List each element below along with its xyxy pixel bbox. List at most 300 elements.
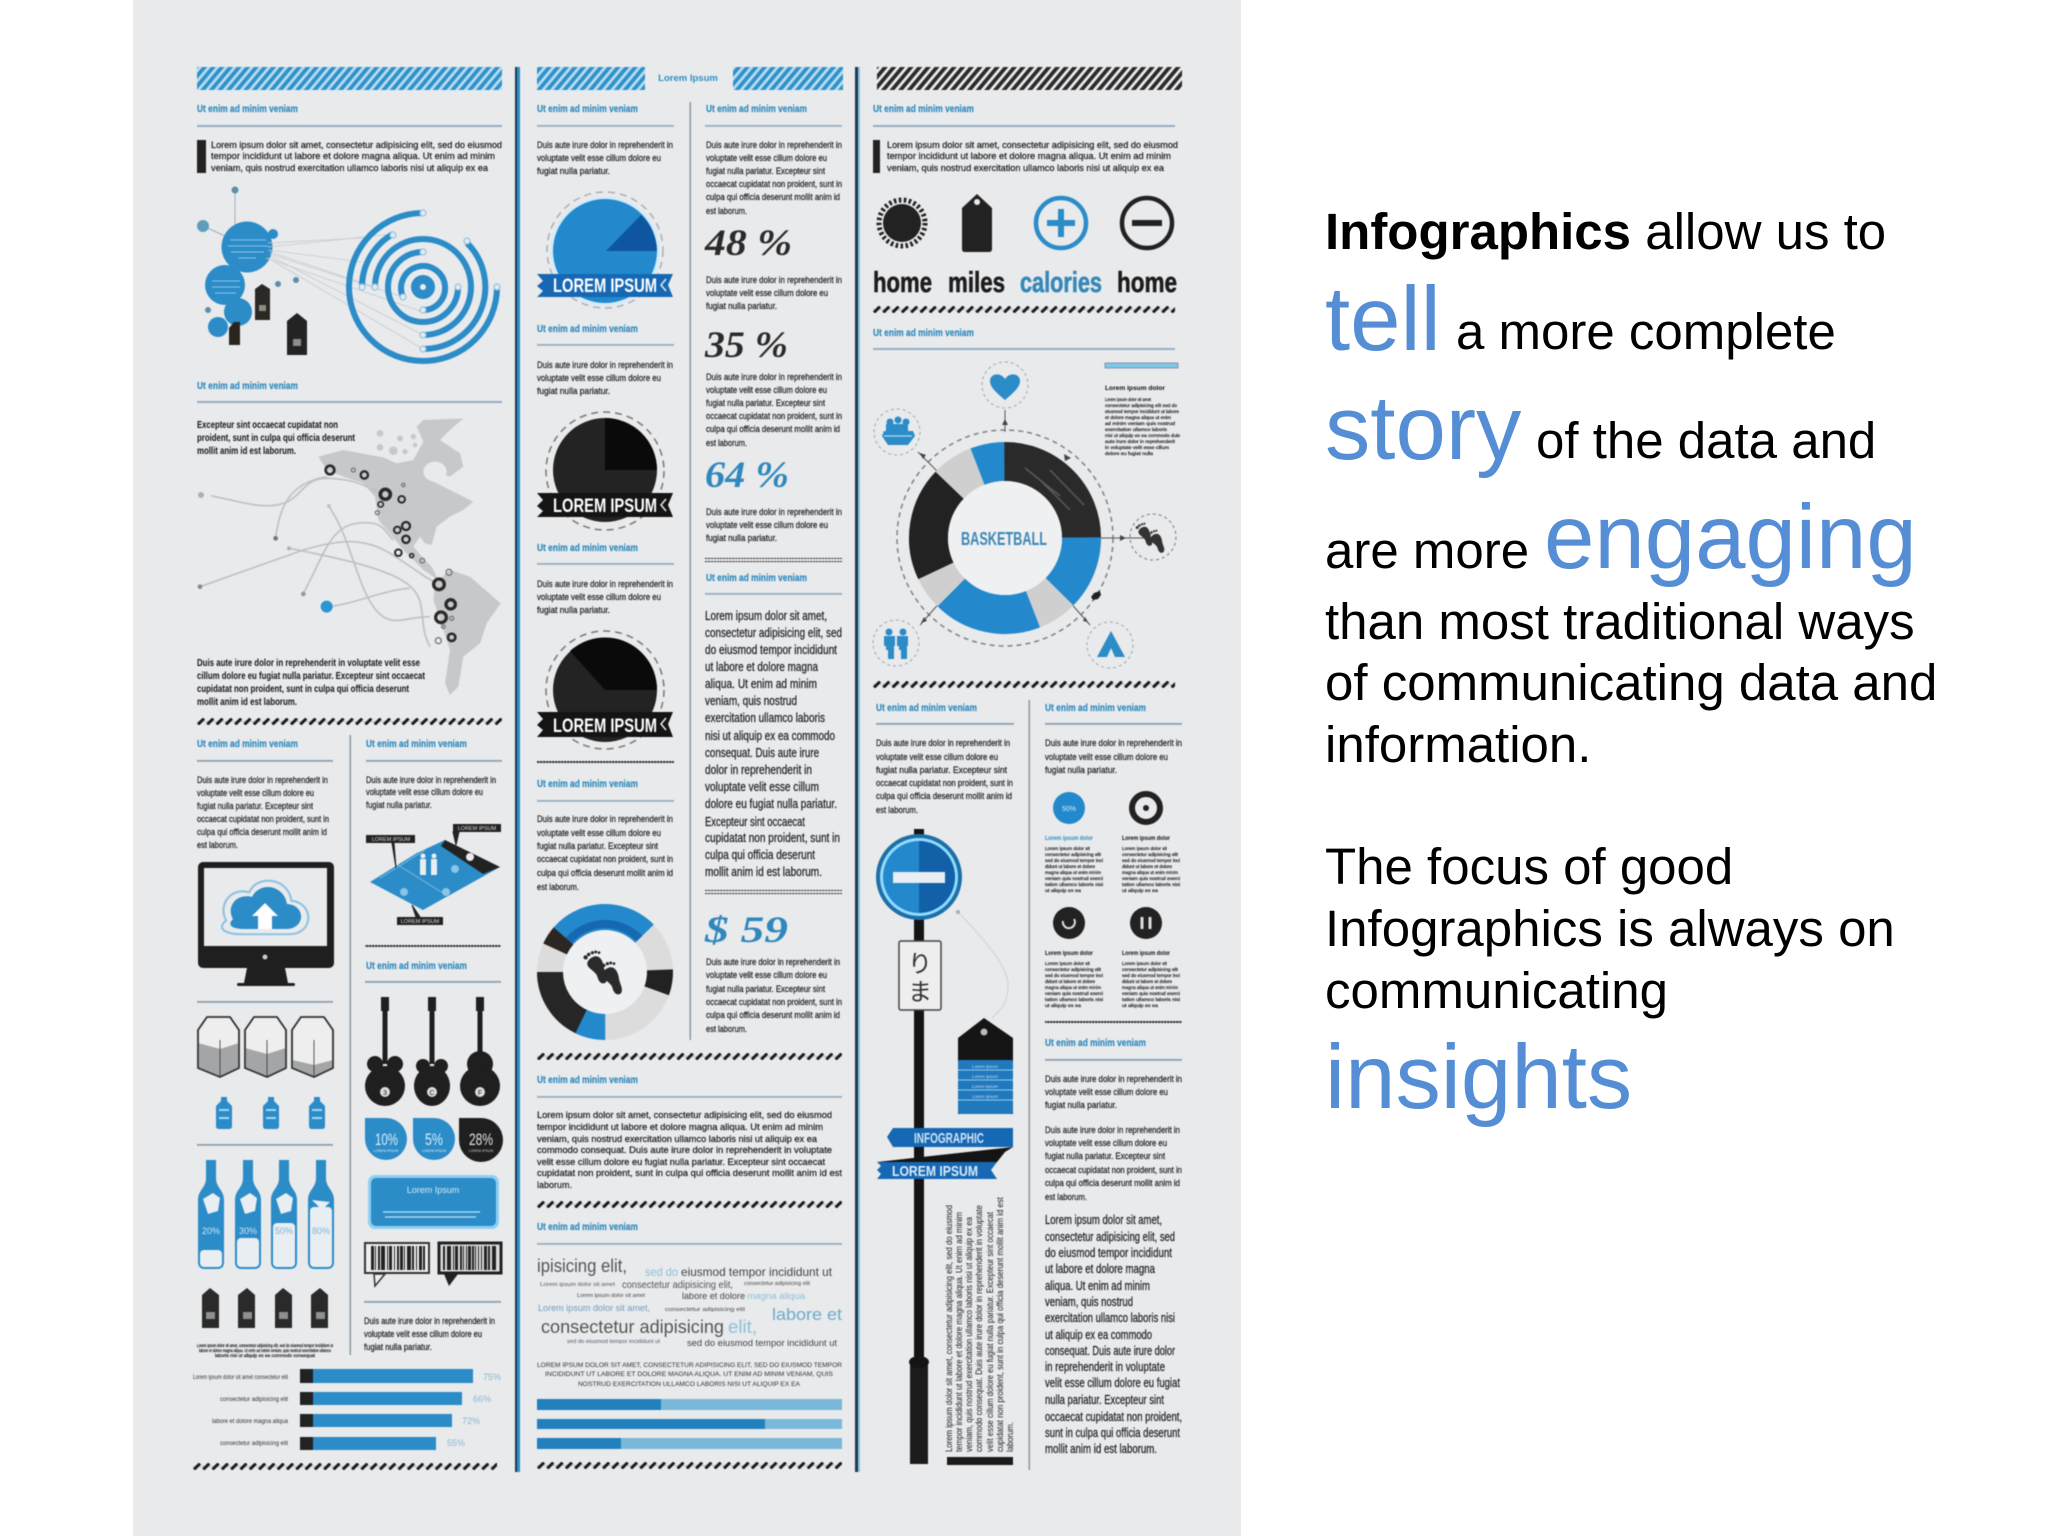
right sub-column: long text: Excepteur sint occaecat [705,815,805,829]
word cloud: consectetur adipisicing elit, [622,1280,733,1291]
column dividers [350,67,1030,1472]
lower column 3 left text [876,703,1014,816]
map caption: cillum dolore eu fugiat nulla pariatur. Excepteur sint occaecat [197,671,426,682]
four icon notes: Lorem ipsum dolor sit [1122,846,1168,851]
street sign pole [909,829,929,1464]
right sub-column: $ 59: culpa qui officia deserunt mollit anim id [706,1010,840,1021]
footprint donut section text: occaecat cupidatat non proident, sunt in [537,854,673,865]
lower column 3 closing text: culpa qui officia deserunt mollit anim id [1045,1178,1180,1189]
third pie section text: voluptate velit esse cillum dolore eu [537,592,661,603]
lower column 3 right text [1045,703,1182,776]
dark pie badge: quarter: LOREM IPSUM [553,496,657,517]
blue pie section text: voluptate velit esse cillum dolore eu [537,153,661,164]
right sub-column: long text: consequat. Duis aute irure [705,746,819,760]
four icon notes: didunt ut labore et dolore [1122,979,1172,984]
basketball section heading: Ut enim ad minim veniam [873,328,974,339]
right sub-column: 35%: occaecat cupidatat non proident, sunt in [706,411,842,422]
rotated text block: tempor incididunt ut labore et dolore magna aliqua. Ut enim ad minim [954,1212,964,1452]
four icon notes: Lorem ipsum dolor [1122,836,1171,842]
word cloud: ipisicing elit, [537,1256,627,1276]
word cloud: Lorem ipsum dolor sit amet, [538,1303,650,1313]
monitor section text [197,739,333,851]
lower column 3 closing text: consectetur adipisicing elit, sed [1045,1230,1175,1244]
lower column 3 closing text: ut aliquip ex ea commodo [1045,1328,1152,1342]
barcodes [365,1243,501,1286]
lower column 3 closing text: Ut enim ad minim veniam [1045,1038,1146,1049]
wide paragraph [537,1075,842,1191]
wide paragraph: velit esse cillum dolore eu fugiat nulla pariatur. Excepteur sint occaecat [537,1157,825,1168]
four icon notes: sed do eiusmod tempor inci [1122,858,1180,863]
small text block [1105,363,1181,456]
four icon notes: tation ullamco laboris nisi [1045,997,1103,1002]
heading text: tell the story: a more complete [1456,303,1836,360]
small text block: nisi ut aliquip ex ea commodo duis [1105,433,1181,438]
monitor section text: Duis aute irure dolor in reprehenderit in [197,775,328,786]
isometric map with labels: LOREM IPSUM [401,919,440,925]
four icon notes: ut aliquip ex ea [1122,1003,1159,1008]
horizontal bar chart: 55% [447,1438,465,1448]
icon: heart [982,362,1028,408]
Japanese street plate: ま [908,972,932,1007]
column 3 heading and lead paragraph: veniam, quis nostrud exercitation ullamco laboris nisi ut aliquip ex ea [887,163,1165,174]
monitor section text: culpa qui officia deserunt mollit anim id [197,827,327,838]
four icon notes: veniam quis nostrud exerci [1045,876,1103,881]
milk cartons [198,1017,333,1077]
progress bars [537,1399,842,1449]
wine bottles with fill levels: 30% [239,1226,257,1236]
rotated text block: commodo consequat. Duis aute irure dolor in reprehenderit in voluptate [974,1205,984,1452]
four icon notes: tation ullamco laboris nisi [1045,882,1103,887]
lower column 3 closing text: Lorem ipsum dolor sit amet, [1045,1213,1162,1227]
word cloud: Ut enim ad minim veniam [537,1222,638,1233]
lower column 3 closing text: occaecat cupidatat non proident, sunt in [1045,1165,1182,1176]
four icon notes: consectetur adipisicing elit [1045,852,1102,857]
icon: minus [1122,198,1172,248]
lower column 3 left text: culpa qui officia deserunt mollit anim id [876,791,1012,802]
heading text: tell the story [1325,203,1937,773]
hanging tag with thread [956,910,1013,1114]
lower column 3 closing text: velit esse cillum dolore eu fugiat [1045,1376,1180,1390]
third pie section text [537,543,674,616]
heading text: tell the story: are more [1325,522,1529,579]
heading text: tell the story: of the data and [1536,412,1876,469]
icon: monitor with cloud upload [198,862,334,986]
dark pie badge: quarter [537,412,673,530]
guitar section heading: Ut enim ad minim veniam [366,961,467,972]
footprint donut section text [537,779,674,893]
right sub-column text: fugiat nulla pariatur. [366,800,432,811]
uppercase caption: INCIDIDUNT UT LABORE ET DOLORE MAGNA ALIQUA. UT ENIM AD MINIM VENIAM, QUIS [545,1371,834,1378]
rotated text block: Lorem ipsum dolor sit amet, consectetur adipisicing elit, sed do eiusmod [944,1205,954,1452]
blue pie section text: Duis aute irure dolor in reprehenderit in [537,140,673,151]
right sub-column: long text: consectetur adipisicing elit, sed [705,626,842,640]
basketball donut chart: BASKETBALL [961,529,1047,549]
text: focus on insights: communicating [1325,962,1668,1019]
lower column 3 left text: occaecat cupidatat non proident, sunt in [876,778,1013,789]
icon: tag [962,194,992,252]
lower column 3 closing text: exercitation ullamco laboris nisi [1045,1311,1175,1325]
four icon notes: veniam quis nostrud exerci [1122,876,1180,881]
four icon notes: sed do eiusmod tempor inci [1045,858,1103,863]
rotated text block: veniam, quis nostrud exercitation ullamco laboris nisi ut aliquip ex ea [964,1217,974,1452]
basketball donut chart [897,410,1153,646]
dark pie section text: voluptate velit esse cillum dolore eu [537,373,661,384]
icon: plus [1036,198,1086,248]
small text block: exercitation ullamco laboris [1105,427,1168,432]
right sub-column: long text [705,573,842,879]
monitor section text: Ut enim ad minim veniam [197,739,298,750]
heading text: tell the story: information. [1325,716,1591,773]
dark pie section text: Duis aute irure dolor in reprehenderit in [537,360,673,371]
four icon notes [1045,792,1180,1008]
bubble cluster with tags [197,186,307,355]
four icon notes: didunt ut labore et dolore [1045,864,1095,869]
guitars: 3 [383,1090,387,1097]
small bottle caption [197,1343,334,1358]
text: focus on insights: Infographics is always on [1325,900,1895,957]
hanging tag with thread: Lorem ipsum [972,1094,998,1099]
right sub-column: long text: Lorem ipsum dolor sit amet, [705,609,827,623]
text: focus on insights: The focus of good [1325,838,1733,895]
heading text: tell the story: Infographics allow us to [1325,203,1886,260]
icon: footprints [1130,514,1176,560]
right sub-column: long text: voluptate velit esse cillum [705,780,819,794]
lower column 3 left text: voluptate velit esse cillum dolore eu [876,752,998,763]
icon labels [873,267,1177,299]
icon: small dart [1091,591,1101,600]
four icon notes: magna aliqua ut enim minim [1122,985,1178,990]
right sub-column text: Duis aute irure dolor in reprehenderit in [366,775,496,786]
right sub-column: 48%: 48 % [704,223,792,264]
wine bottles with fill levels [198,1160,334,1269]
heading text: tell the story: tell [1325,269,1441,370]
word cloud: elit, [728,1317,757,1337]
map caption: cupidatat non proident, sunt in culpa qui officia deserunt [197,684,410,695]
small text block: Lorem ipsum dolor sit amet [1105,397,1152,402]
Japanese street plate [899,941,941,1010]
small text block: Lorem ipsum dolor [1105,386,1166,392]
heading text: tell the story: story [1325,378,1522,479]
lower column 3 closing text: mollit anim id est laborum. [1045,1442,1157,1456]
word cloud: Lorem ipsum dolor sit amet [540,1282,616,1288]
guitar section heading [365,961,501,983]
right sub-column: 64%: fugiat nulla pariatur. [706,533,777,544]
small text block: ad minim veniam quis nostrud [1105,421,1176,426]
lower column 3 left text: fugiat nulla pariatur. Excepteur sint [876,765,1007,776]
lower column 3 closing text [1045,1038,1182,1456]
right sub-column: long text: dolore eu fugiat nulla pariatur. [705,797,837,811]
small text block: eiusmod tempor incididunt ut labore [1105,409,1179,414]
wide paragraph: Lorem ipsum dolor sit amet, consectetur adipisicing elit, sed do eiusmod [537,1110,832,1121]
third pie section text: Duis aute irure dolor in reprehenderit in [537,579,673,590]
map intro text: proident, sunt in culpa qui officia deserunt [197,433,356,444]
four icon notes: consectetur adipisicing elit [1045,967,1102,972]
column 1 header stripe [197,67,502,90]
four icon notes: ut aliquip ex ea [1122,888,1159,893]
concentric arc chart with leader lines [266,210,500,361]
column 3 header stripe [877,67,1182,90]
isometric map with labels: LOREM IPSUM [458,826,497,832]
icon labels: home [873,267,932,299]
lower column 3 closing text: in reprehenderit in voluptate [1045,1360,1165,1374]
right sub-column: 48%: fugiat nulla pariatur. Excepteur sint [706,166,825,177]
icon labels: calories [1020,267,1102,299]
four icon notes: Lorem ipsum dolor sit [1122,961,1168,966]
wide paragraph: Ut enim ad minim veniam [537,1075,638,1086]
map intro text: Excepteur sint occaecat cupidatat non [197,420,338,431]
isometric map with labels: LOREM IPSUM [372,837,411,843]
direction signs: LOREM IPSUM [892,1163,978,1180]
four icon notes: Lorem ipsum dolor [1122,951,1171,957]
lower column 3 closing text: voluptate velit esse cillum dolore eu [1045,1087,1168,1098]
barcode caption: Duis aute irure dolor in reprehenderit in [364,1316,495,1327]
right sub-column: long text: culpa qui officia deserunt [705,848,815,862]
isometric map with labels [366,824,501,925]
map of the Americas with routes [198,418,501,695]
right sub-column: 35%: fugiat nulla pariatur. Excepteur sint [706,398,825,409]
right sub-column: long text: cupidatat non proident, sunt in [705,831,840,845]
uppercase caption: LOREM IPSUM DOLOR SIT AMET, CONSECTETUR ADIPISICING ELIT, SED DO EIUSMOD TEMPOR [537,1362,842,1369]
hanging tag with thread: Lorem ipsum [972,1084,998,1089]
barcode caption [364,1316,495,1353]
right sub-column: long text: do eiusmod tempor incididunt [705,643,837,657]
four icon notes: sed do eiusmod tempor inci [1045,973,1103,978]
percentage drops: LOREM IPSUM [374,1149,398,1153]
blue pie section text: Ut enim ad minim veniam [537,104,638,115]
barcode caption: fugiat nulla pariatur. [364,1342,432,1353]
dark pie section text: Ut enim ad minim veniam [537,324,638,335]
monitor section text: voluptate velit esse cillum dolore eu [197,788,314,799]
rotated text block: laborum. [1005,1422,1015,1452]
right sub-column: 64%: voluptate velit esse cillum dolore eu [706,520,828,531]
four icon notes: consectetur adipisicing elit [1122,967,1179,972]
four icon notes: veniam quis nostrud exerci [1122,991,1180,996]
lower column 3 closing text: sunt in culpa qui officia deserunt [1045,1426,1180,1440]
small bottle caption: laboris nisi ut aliquip ex ea commodo consequat [215,1353,316,1358]
column 2 header: Lorem Ipsum [658,73,718,84]
word cloud: Lorem ipsum dolor sit amet [577,1293,646,1299]
four icon notes: Lorem ipsum dolor [1045,951,1094,957]
lower column 3 right text: Ut enim ad minim veniam [1045,703,1146,714]
guitars: F [478,1090,482,1097]
four icon notes: didunt ut labore et dolore [1122,864,1172,869]
wide paragraph: cupidatat non proident, sunt in culpa qui officia deserunt mollit anim id est [537,1168,842,1179]
small text block: in voluptate velit esse cillum [1105,445,1169,450]
right sub-column text: Ut enim ad minim veniam [366,739,467,750]
right sub-column: $ 59: fugiat nulla pariatur. Excepteur sint [706,984,825,995]
lower column 3 closing text: occaecat cupidatat non proident, [1045,1410,1182,1424]
column 1 lead paragraph: tempor incididunt ut labore et dolore magna aliqua. Ut enim ad minim [211,151,495,162]
right sub-column: long text: nisi ut aliquip ex ea commodo [705,729,835,743]
column 3 heading and lead paragraph: Lorem ipsum dolor sit amet, consectetur adipisicing elit, sed do eiusmod [887,140,1178,151]
right sub-column text [366,739,502,811]
lower column 3 closing text: consequat. Duis aute irure dolor [1045,1344,1175,1358]
word cloud: consectetur adipisicing elit [665,1307,746,1313]
word cloud: eiusmod tempor incididunt ut [681,1265,833,1279]
heading text: tell the story: of communicating data and [1325,654,1937,711]
lower column 3 closing text: fugiat nulla pariatur. Excepteur sint [1045,1151,1165,1162]
blue label box [368,1175,499,1229]
footprint donut section text: est laborum. [537,882,579,893]
lower column 3 left text: Duis aute irure dolor in reprehenderit in [876,738,1010,749]
word cloud: magna aliqua [747,1291,805,1301]
right sub-column: long text: dolor in reprehenderit in [705,763,812,777]
percentage drops: 28% [469,1130,493,1149]
price tags [202,1288,328,1328]
right sub-column: long text: exercitation ullamco laboris [705,711,825,725]
column 1 heading: Ut enim ad minim veniam [197,104,298,115]
wine bottles with fill levels: 50% [275,1226,293,1236]
icon labels: miles [948,267,1005,299]
icon: tent [1087,622,1133,668]
text: focus on insights: insights [1325,1027,1632,1128]
four icon notes: 50% [1062,806,1076,813]
lower column 3 closing text: nulla pariatur. Excepteur sint [1045,1393,1164,1407]
right sub-column: long text: veniam, quis nostrud [705,694,797,708]
uppercase caption: NOSTRUD EXERCITATION ULLAMCO LABORIS NISI UT ALIQUIP EX EA [578,1381,801,1388]
right sub-column: $ 59: Duis aute irure dolor in reprehenderit in [706,957,840,968]
percentage drops: LOREM IPSUM [469,1149,493,1153]
four icon notes: Lorem ipsum dolor sit [1045,846,1091,851]
footprint donut section text: culpa qui officia deserunt mollit anim id [537,868,673,879]
wide paragraph: laborum. [537,1180,572,1191]
wide paragraph: veniam, quis nostrud exercitation ullamco laboris nisi ut aliquip ex ea [537,1134,818,1145]
blue label box: Lorem Ipsum [407,1185,459,1195]
right sub-column: 48%: fugiat nulla pariatur. [706,301,777,312]
word cloud: sed do eiusmod tempor incididunt ut [567,1339,661,1345]
heading text: tell the story: than most traditional ways [1325,593,1915,650]
lower column 3 closing text: do eiusmod tempor incididunt [1045,1246,1172,1260]
wide paragraph: commodo consequat. Duis aute irure dolor in reprehenderit in voluptate [537,1145,832,1156]
wine bottles with fill levels: 80% [312,1226,330,1236]
icon: sun [879,200,925,246]
guitars: C [429,1090,435,1097]
lower column 3 closing text: voluptate velit esse cillum dolore eu [1045,1138,1167,1149]
wide paragraph: tempor incididunt ut labore et dolore magna aliqua. Ut enim ad minim [537,1122,823,1133]
rotated text block: cupidatat non proident, sunt in culpa qui officia deserunt mollit anim id est [995,1197,1005,1452]
right sub-column: 48%: voluptate velit esse cillum dolore eu [706,288,828,299]
small text block: dolore eu fugiat nulla [1105,451,1153,456]
right sub-column: 48%: Ut enim ad minim veniam [706,104,807,115]
lower column 3 closing text: Duis aute irure dolor in reprehenderit in [1045,1074,1182,1085]
percentage drops: 10% [375,1130,398,1149]
right sub-column: 48% [704,104,842,312]
four icon notes: magna aliqua ut enim minim [1122,870,1178,875]
percentage drops: LOREM IPSUM [422,1149,446,1153]
blue pie section text: fugiat nulla pariatur. [537,166,610,177]
base bar [947,1457,1013,1465]
right sub-column: $ 59: voluptate velit esse cillum dolore eu [706,970,827,981]
icon: cake [874,409,920,455]
lower column 3 right text: Duis aute irure dolor in reprehenderit in [1045,738,1182,749]
column 2 header [537,67,843,90]
horizontal bar chart: consectetur adipisicing elit [220,1440,288,1447]
wine bottles with fill levels: 20% [202,1226,220,1236]
percentage drops: 5% [425,1130,443,1149]
right sub-column: 48%: occaecat cupidatat non proident, sunt in [706,179,842,190]
icon: people [873,620,919,666]
guitars [365,997,500,1106]
map caption [197,658,426,708]
right sub-column: 35%: culpa qui officia deserunt mollit anim id [706,424,840,435]
small text block: et dolore magna aliqua ut enim [1105,415,1171,420]
footprint donut section text: fugiat nulla pariatur. Excepteur sint [537,841,658,852]
column 3 heading and lead paragraph [873,104,1178,174]
word cloud: labore et [772,1305,842,1324]
no-entry road sign [876,834,962,920]
lower column 3 left text: est laborum. [876,805,918,816]
right sub-column: 64% [705,455,842,544]
right sub-column: long text: Ut enim ad minim veniam [706,573,807,584]
column 3 heading and lead paragraph: tempor incididunt ut labore et dolore magna aliqua. Ut enim ad minim [887,151,1171,162]
lower column 3 right text: voluptate velit esse cillum dolore eu [1045,752,1168,763]
horizontal bar chart: 66% [473,1394,491,1404]
horizontal bar chart [193,1369,501,1450]
dark pie section text [537,324,674,397]
monitor section text: occaecat cupidatat non proident, sunt in [197,814,329,825]
four icon notes: magna aliqua ut enim minim [1045,870,1101,875]
blue pie section text [537,104,674,177]
footprint donut section text: voluptate velit esse cillum dolore eu [537,828,661,839]
horizontal bar chart: consectetur adipisicing elit [220,1396,288,1403]
four icon notes: sed do eiusmod tempor inci [1122,973,1180,978]
uppercase caption [537,1362,842,1388]
background panel [133,0,1241,1536]
horizontal bar chart: labore et dolore magna aliqua [212,1418,288,1425]
direction signs [877,1128,1013,1180]
lower column 3 closing text: ut labore et dolore magna [1045,1262,1155,1276]
right sub-column: 35% [704,325,842,449]
dark pie badge: wedge: LOREM IPSUM [553,716,657,737]
small text block: aute irure dolor in reprehenderit [1105,439,1176,444]
hanging tag with thread: Lorem ipsum [972,1074,998,1079]
map section heading: Ut enim ad minim veniam [197,381,298,392]
monitor section text: fugiat nulla pariatur. Excepteur sint [197,801,313,812]
horizontal bar chart: Lorem ipsum dolor sit amet consectetur elit [193,1374,288,1381]
four icon notes: ut aliquip ex ea [1045,1003,1082,1008]
right sub-column: 35%: voluptate velit esse cillum dolore eu [706,385,827,396]
blue pie badge [537,192,673,308]
right sub-column: 48%: culpa qui officia deserunt mollit anim id [706,192,840,203]
small bottle caption: Lorem ipsum dolor sit amet, consectetur adipisicing elit, sed do eiusmod tempor incididunt ut [197,1343,334,1348]
small bottle caption: labore et dolore magna aliqua. Ut enim ad minim veniam, quis nostrud exercitation ullamco [199,1348,331,1353]
right sub-column: $ 59: $ 59 [704,910,788,951]
lower column 3 closing text: aliqua. Ut enim ad minim [1045,1279,1150,1293]
word cloud: consectetur adipisicing elit [744,1281,811,1287]
right sub-column: 35%: est laborum. [706,438,747,449]
rotated text block [944,1197,1015,1452]
four icon notes: magna aliqua ut enim minim [1045,985,1101,990]
dark pie section text: fugiat nulla pariatur. [537,386,610,397]
lower column 3 closing text: Duis aute irure dolor in reprehenderit in [1045,1125,1180,1136]
small blue bottles [216,1097,325,1129]
lower column 3 right text: fugiat nulla pariatur. [1045,765,1117,776]
dark pie badge: wedge [537,631,673,749]
lower column 3 closing text: fugiat nulla pariatur. [1045,1100,1117,1111]
four icon notes: Lorem ipsum dolor [1045,836,1094,842]
horizontal bar chart: 72% [462,1416,480,1426]
column 3 heading and lead paragraph: Ut enim ad minim veniam [873,104,974,115]
right sub-column: long text: ut labore et dolore magna [705,660,818,674]
text: focus on insights [1325,838,1895,1128]
map intro text [197,420,356,457]
right sub-column text: voluptate velit esse cillum dolore eu [366,787,483,798]
word cloud [537,1222,842,1348]
third pie section text: fugiat nulla pariatur. [537,605,610,616]
word cloud: consectetur adipisicing [541,1317,724,1337]
four icon notes: Lorem ipsum dolor sit [1045,961,1091,966]
right sub-column: long text: aliqua. Ut enim ad minim [705,677,817,691]
